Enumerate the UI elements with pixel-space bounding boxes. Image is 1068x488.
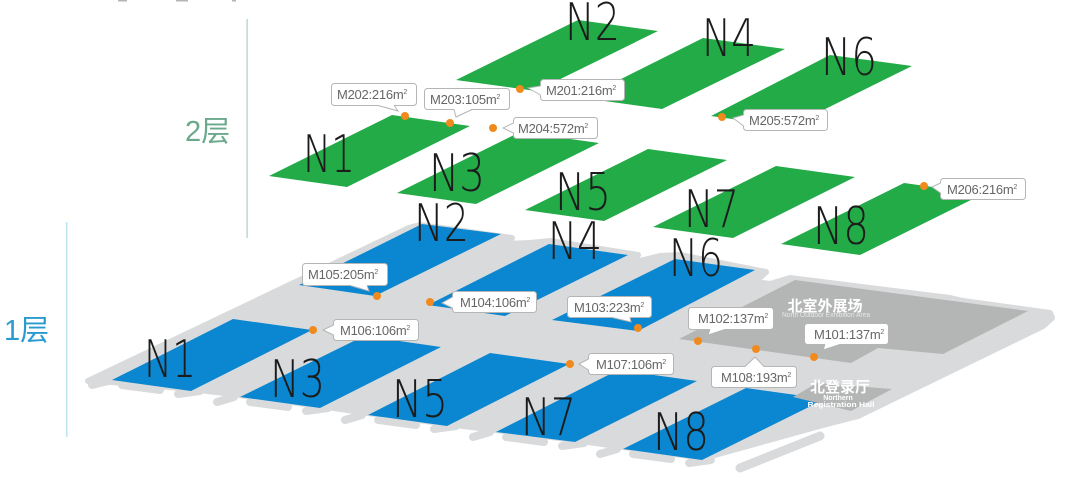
callout: M105: M105:205m (308, 267, 374, 282)
callout: M108: 2 (787, 372, 791, 379)
floor 1 base plan (88, 225, 1052, 468)
hall labels floor 2: N4 (702, 9, 756, 69)
callout: M108: M108:193m (721, 370, 787, 385)
hall labels floor 1: N4 (548, 212, 602, 272)
callout: M201: 2 (612, 85, 616, 92)
callout: M105: 2 (374, 269, 378, 276)
service road (740, 436, 820, 468)
floor 2 label: 2层 (185, 116, 230, 148)
hall labels floor 1: N6 (669, 229, 723, 289)
callout: M107: 2 (662, 359, 666, 366)
callout: M102 (688, 308, 774, 345)
callout: M203 (424, 88, 510, 127)
callout: M204: M204:572m (518, 121, 584, 136)
callout: M206: M206:216m (947, 182, 1013, 197)
callout: M204: 2 (584, 123, 588, 130)
hall labels floor 2: N1 (303, 125, 355, 185)
callout: M104: 2 (526, 297, 530, 304)
hall labels floor 1: N1 (144, 330, 196, 390)
floor 1 label: 1层 (4, 315, 49, 347)
callout: M201: M201:216m (546, 83, 612, 98)
hall labels floor 1 (144, 194, 723, 463)
callout: M205 (718, 110, 828, 130)
callout: M202: 2 (403, 89, 407, 96)
callout: M105 (302, 264, 388, 300)
callout: M206: 2 (1013, 184, 1017, 191)
floor 1 bracket line (66, 222, 68, 437)
callout: M101: 2 (880, 329, 884, 336)
callout: M104 (426, 292, 536, 312)
callout: M104: M104:106m (460, 295, 526, 310)
north registration hall: Northern (823, 395, 853, 402)
callout: M205: 2 (815, 115, 819, 122)
north registration hall: Registration Hall (808, 402, 875, 409)
callout: M103 (568, 296, 652, 332)
callout: M101 (804, 324, 888, 361)
north outdoor exhibition area (679, 280, 1028, 363)
callout: M203: M203:105m (430, 92, 496, 107)
callout: M106 (309, 320, 418, 340)
callout: M106: 2 (406, 325, 410, 332)
callout: M203: 2 (496, 94, 500, 101)
hall labels floor 2: N5 (555, 163, 611, 223)
callout: M201 (516, 80, 624, 100)
callout: M202 (332, 84, 416, 120)
callout: M205: M205:572m (749, 113, 815, 128)
cropped heading remnant (118, 0, 236, 2)
hall labels floor 1: N5 (392, 370, 448, 430)
hall labels floor 1: N3 (270, 350, 325, 410)
hall labels floor 2: N6 (821, 28, 877, 88)
callout: M202: M202:216m (337, 87, 403, 102)
callout: M206 (920, 178, 1026, 200)
hall labels floor 2 (303, 0, 877, 257)
callout: M108 (712, 345, 796, 388)
floor 1 blue halls (112, 224, 825, 460)
hall labels floor 2: N7 (684, 180, 739, 240)
hall labels floor 1: N8 (653, 403, 709, 463)
callout: M102: M102:137m (698, 311, 764, 326)
hall labels floor 2: N8 (813, 197, 869, 257)
north outdoor exhibition area: 北室外展场 (787, 297, 863, 315)
callout: M101: M101:137m (814, 327, 880, 342)
north registration hall (793, 379, 892, 411)
hall labels floor 1: N2 (414, 194, 469, 254)
hall labels floor 2: N3 (429, 144, 485, 204)
floor 2 bracket line (246, 19, 248, 238)
callout: M107 (566, 354, 674, 374)
floor 2 green halls (269, 20, 983, 255)
callout: M106: M106:106m (340, 323, 406, 338)
callout: M204 (489, 118, 598, 138)
north registration hall: 北登录厅 (810, 379, 870, 396)
hall labels floor 1: N7 (521, 388, 576, 448)
north outdoor exhibition area: North Outdoor Exhibition Area (782, 312, 870, 319)
callout: M107: M107:106m (596, 357, 662, 372)
callout: M102: 2 (764, 313, 768, 320)
callout: M103: M103:223m (574, 300, 640, 315)
callout: M103: 2 (640, 302, 644, 309)
